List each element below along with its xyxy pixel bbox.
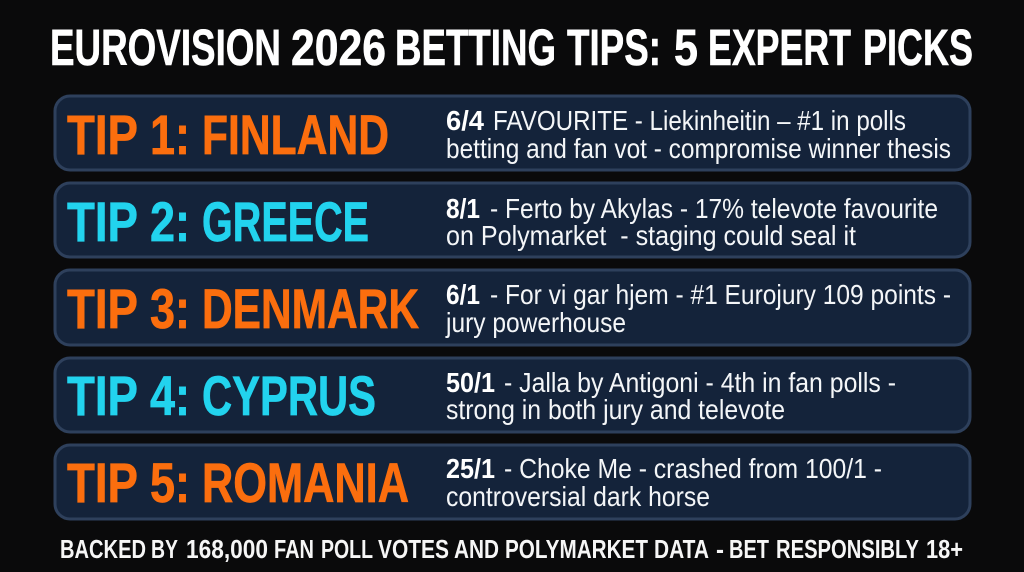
footer note: AND [454,534,499,564]
heading: tip 4 [67,364,376,427]
heading: tip 5: TIP [67,451,138,514]
text: tip 2 details: on Polymarket - staging could seal it [446,220,856,251]
footer note: BY [151,534,178,564]
footer note: 168,000 [186,534,268,564]
footer note: - [716,534,724,564]
heading: tip 4: TIP [67,364,138,427]
heading: tip 3: TIP [67,277,138,340]
heading: tip 2: TIP [67,190,138,253]
text: tip 4 details: strong in both jury and televote [446,394,785,425]
text: tip 5 details: - Choke Me - crashed from 100/1 - [504,453,882,484]
heading: tip 2: GREECE [202,190,369,253]
text: tip 3 details [445,279,951,338]
title: 2026 [291,19,386,76]
panel: tip 3 Denmark [55,270,970,345]
heading: tip 1: 1: [150,103,190,166]
panel: tip 4 Cyprus [55,358,970,432]
title: BETTING [395,19,556,76]
text: tip 4 details [446,367,896,425]
text: tip 1 details: FAVOURITE - Liekinheitin – #1 in polls [493,105,906,136]
footer note: BET [729,534,769,564]
text: tip 4 details: - Jalla by Antigoni - 4th in fan polls - [504,367,896,398]
text: tip 3 details: - For vi gar hjem - #1 Eurojury 109 points - [490,279,951,310]
heading: tip 4: 4: [150,364,190,427]
text: tip 5 details: 25/1 [446,453,495,484]
heading: tip 5: ROMANIA [202,451,409,514]
heading: tip 1: TIP [67,103,138,166]
footer note: 18+ [926,534,963,564]
text: tip 3 details: 6/1 [446,279,480,310]
text: tip 2 details: 8/1 [446,193,480,224]
footer note [60,534,963,564]
text: tip 5 details: controversial dark horse [446,481,710,512]
heading: tip 2 [67,190,369,253]
title: PICKS [863,19,973,76]
panel: tip 5 Romania [55,445,970,519]
footer note: FAN [274,534,314,564]
text: tip 2 details: - Ferto by Akylas - 17% televote favourite [490,193,938,224]
heading: tip 5 [67,451,409,514]
text: tip 2 details [446,193,938,251]
title: TIPS: [567,19,661,76]
panel: tip 1 Finland [55,96,970,170]
footer note: POLYMARKET [505,534,648,564]
footer note: RESPONSIBLY [776,534,919,564]
title: 5 [674,19,698,76]
text: tip 1 details: 6/4 [446,105,485,136]
text: tip 5 details [446,453,882,512]
text: tip 4 details: 50/1 [446,367,495,398]
heading: tip 1 [67,103,389,166]
text: tip 1 details [446,105,951,164]
title [50,19,973,76]
heading: tip 1: FINLAND [202,103,389,166]
footer note: VOTES [378,534,449,564]
heading: tip 3: 3: [150,277,190,340]
heading: tip 2: 2: [150,190,190,253]
title: EUROVISION [50,19,281,76]
heading: tip 3 [67,277,419,340]
heading: tip 3: DENMARK [202,277,419,340]
text: tip 3 details: jury powerhouse [445,307,626,338]
footer note: POLL [321,534,373,564]
heading: tip 4: CYPRUS [202,364,376,427]
title: EXPERT [708,19,851,76]
text: tip 1 details: betting and fan vot - compromise winner thesis [446,133,951,164]
footer note: DATA [654,534,709,564]
footer note: BACKED [60,534,146,564]
panel: tip 2 Greece [55,183,970,257]
heading: tip 5: 5: [150,451,190,514]
